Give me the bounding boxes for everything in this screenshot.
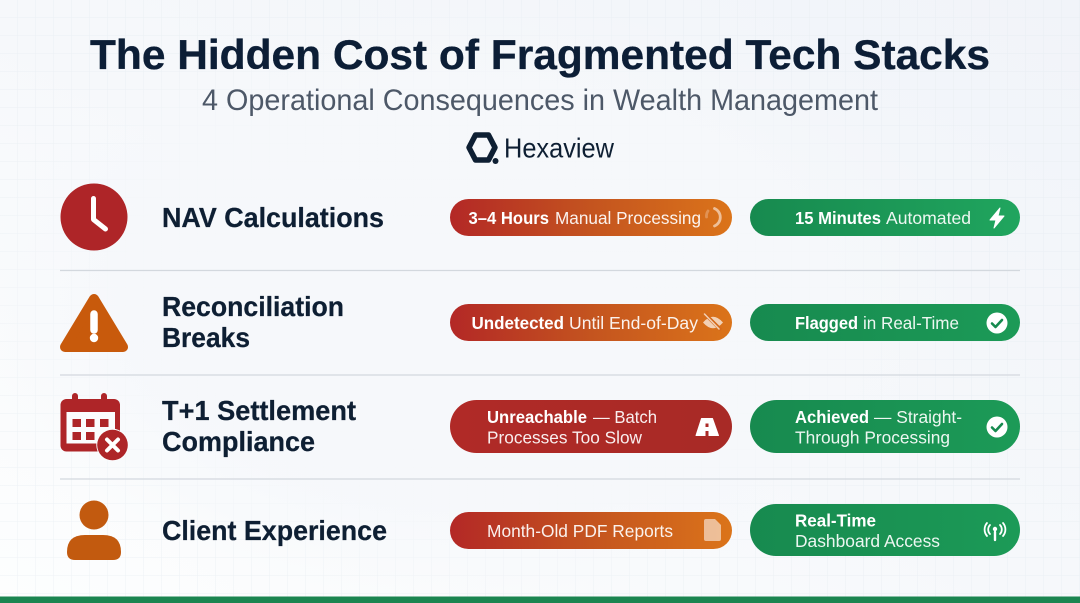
- pill: before: Month-Old PDF Reports: [487, 521, 673, 541]
- pill: after: [750, 199, 1020, 236]
- icon: spinner: [706, 208, 720, 226]
- icon: eye off: [703, 314, 723, 330]
- row: T+1 Settlement Compliance: [60, 395, 1020, 461]
- icon: broadcast: [985, 523, 1005, 540]
- pill: before: Undetected: [472, 313, 564, 333]
- pill: before: [450, 512, 732, 549]
- pill: after: 15 Minutes: [795, 208, 881, 228]
- pill: after: [750, 504, 1020, 556]
- pill: after: Automated: [886, 208, 971, 228]
- icon: calendar with x: [60, 396, 129, 461]
- heading: T+1 Settlement Compliance: Compliance: [162, 426, 315, 457]
- pill: before: — Batch: [593, 407, 657, 427]
- pill: after: Real-Time: [795, 510, 876, 530]
- footer bar: [0, 596, 1080, 603]
- pill: after: — Straight-: [874, 407, 962, 427]
- heading: Reconciliation Breaks: Reconciliation: [162, 291, 344, 322]
- pill: before: Unreachable: [487, 407, 587, 427]
- pill: before: Manual Processing: [555, 208, 701, 228]
- icon: warning triangle: [65, 299, 123, 347]
- heading: Reconciliation Breaks: Breaks: [162, 322, 250, 353]
- heading: Client Experience: Client Experience: [162, 515, 387, 546]
- pill: before: [450, 304, 732, 341]
- icon: document: [704, 519, 721, 541]
- row: Client Experience: [67, 500, 1020, 560]
- pill: before: Until End-of-Day: [569, 313, 698, 333]
- subtitle: 4 Operational Consequences in Wealth Management: [202, 84, 878, 117]
- pill: before: Processes Too Slow: [487, 428, 642, 448]
- pill: after: [750, 304, 1020, 341]
- pill: after: in Real-Time: [863, 313, 959, 333]
- pill: after: Through Processing: [795, 428, 950, 448]
- pill: after: Flagged: [795, 313, 858, 333]
- heading: NAV Calculations: NAV Calculations: [162, 202, 384, 233]
- icon: check circle: [986, 416, 1008, 438]
- pill: after: [750, 400, 1020, 453]
- pill: after: Dashboard Access: [795, 531, 940, 551]
- heading: T+1 Settlement Compliance: T+1 Settlement: [162, 395, 356, 426]
- icon: road: [696, 418, 718, 436]
- title: The Hidden Cost of Fragmented Tech Stacks: [90, 31, 990, 78]
- logo: Hexaview: [469, 132, 615, 164]
- icon: clock: [60, 184, 128, 250]
- row: NAV Calculations: [60, 184, 1020, 250]
- pill: before: [450, 199, 732, 236]
- row: Reconciliation Breaks: [65, 291, 1020, 353]
- heading: T+1 Settlement Compliance: [162, 395, 356, 457]
- pill: after: Achieved: [795, 407, 869, 427]
- logo: Hexaview: Hexaview: [504, 132, 615, 164]
- icon: check circle: [986, 312, 1008, 334]
- heading: Reconciliation Breaks: [162, 291, 344, 353]
- icon: person: [67, 500, 121, 560]
- pill: before: [450, 400, 732, 453]
- pill: before: 3–4 Hours: [468, 208, 549, 228]
- icon: lightning: [990, 208, 1004, 228]
